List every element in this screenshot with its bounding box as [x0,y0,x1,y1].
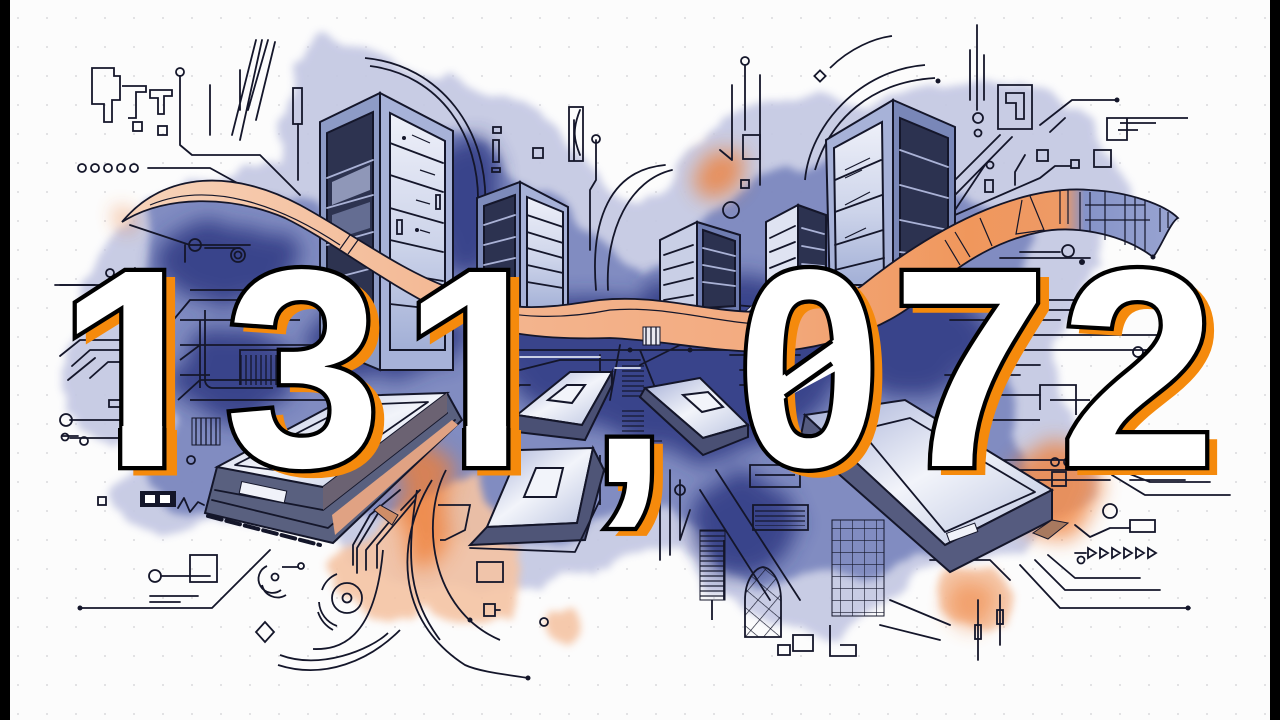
circuit traces: upper centre [365,57,760,290]
server rack: large left [320,93,453,370]
wash: peach bloom under chip [320,480,1010,645]
chip: top centre [517,372,612,440]
chip: lower centre [470,448,604,552]
digit 3: 3 [225,211,381,526]
digit 1 second: 1 [402,211,558,526]
digit 3: 3 [236,218,392,533]
chip: centre right [640,378,748,455]
circuit traces: upper right [805,25,1230,515]
wash: pale lavender base [60,35,1119,640]
digit 1: 1 [69,218,225,533]
digit 2: 2 [1060,211,1216,526]
wash: orange blooms [110,153,1097,622]
digit 1: 1 [58,211,214,526]
slashed digit 0: 0 [747,219,891,533]
server rack: small centre right [660,222,740,315]
wash: deep indigo [160,130,985,573]
digit 7: 7 [892,211,1048,526]
digit 7: 7 [903,218,1059,533]
circuit traces: lower right [700,472,1190,660]
digit 2: 2 [1070,218,1226,533]
comma: , [589,220,669,544]
circuit traces: centre board [500,285,808,600]
watercolor wash [60,35,1119,645]
server rack: small right [766,205,826,290]
ribbon: flowing data band [122,181,1178,352]
digit 1 [72,268,177,476]
circuit traces: lower left [78,470,548,680]
headline number: 131,072 [72,264,1218,536]
comma: , [600,227,680,551]
digit 1 second [416,268,521,476]
server rack: small left [477,182,568,325]
wash: mid blue [145,128,1033,585]
circuit traces: upper left [55,40,340,512]
server rack: large right [826,100,955,300]
chip: large right [800,400,1068,572]
digit 1 second: 1 [413,218,569,533]
chip: large left [205,393,462,545]
slashed digit 0: 0 [737,212,881,526]
